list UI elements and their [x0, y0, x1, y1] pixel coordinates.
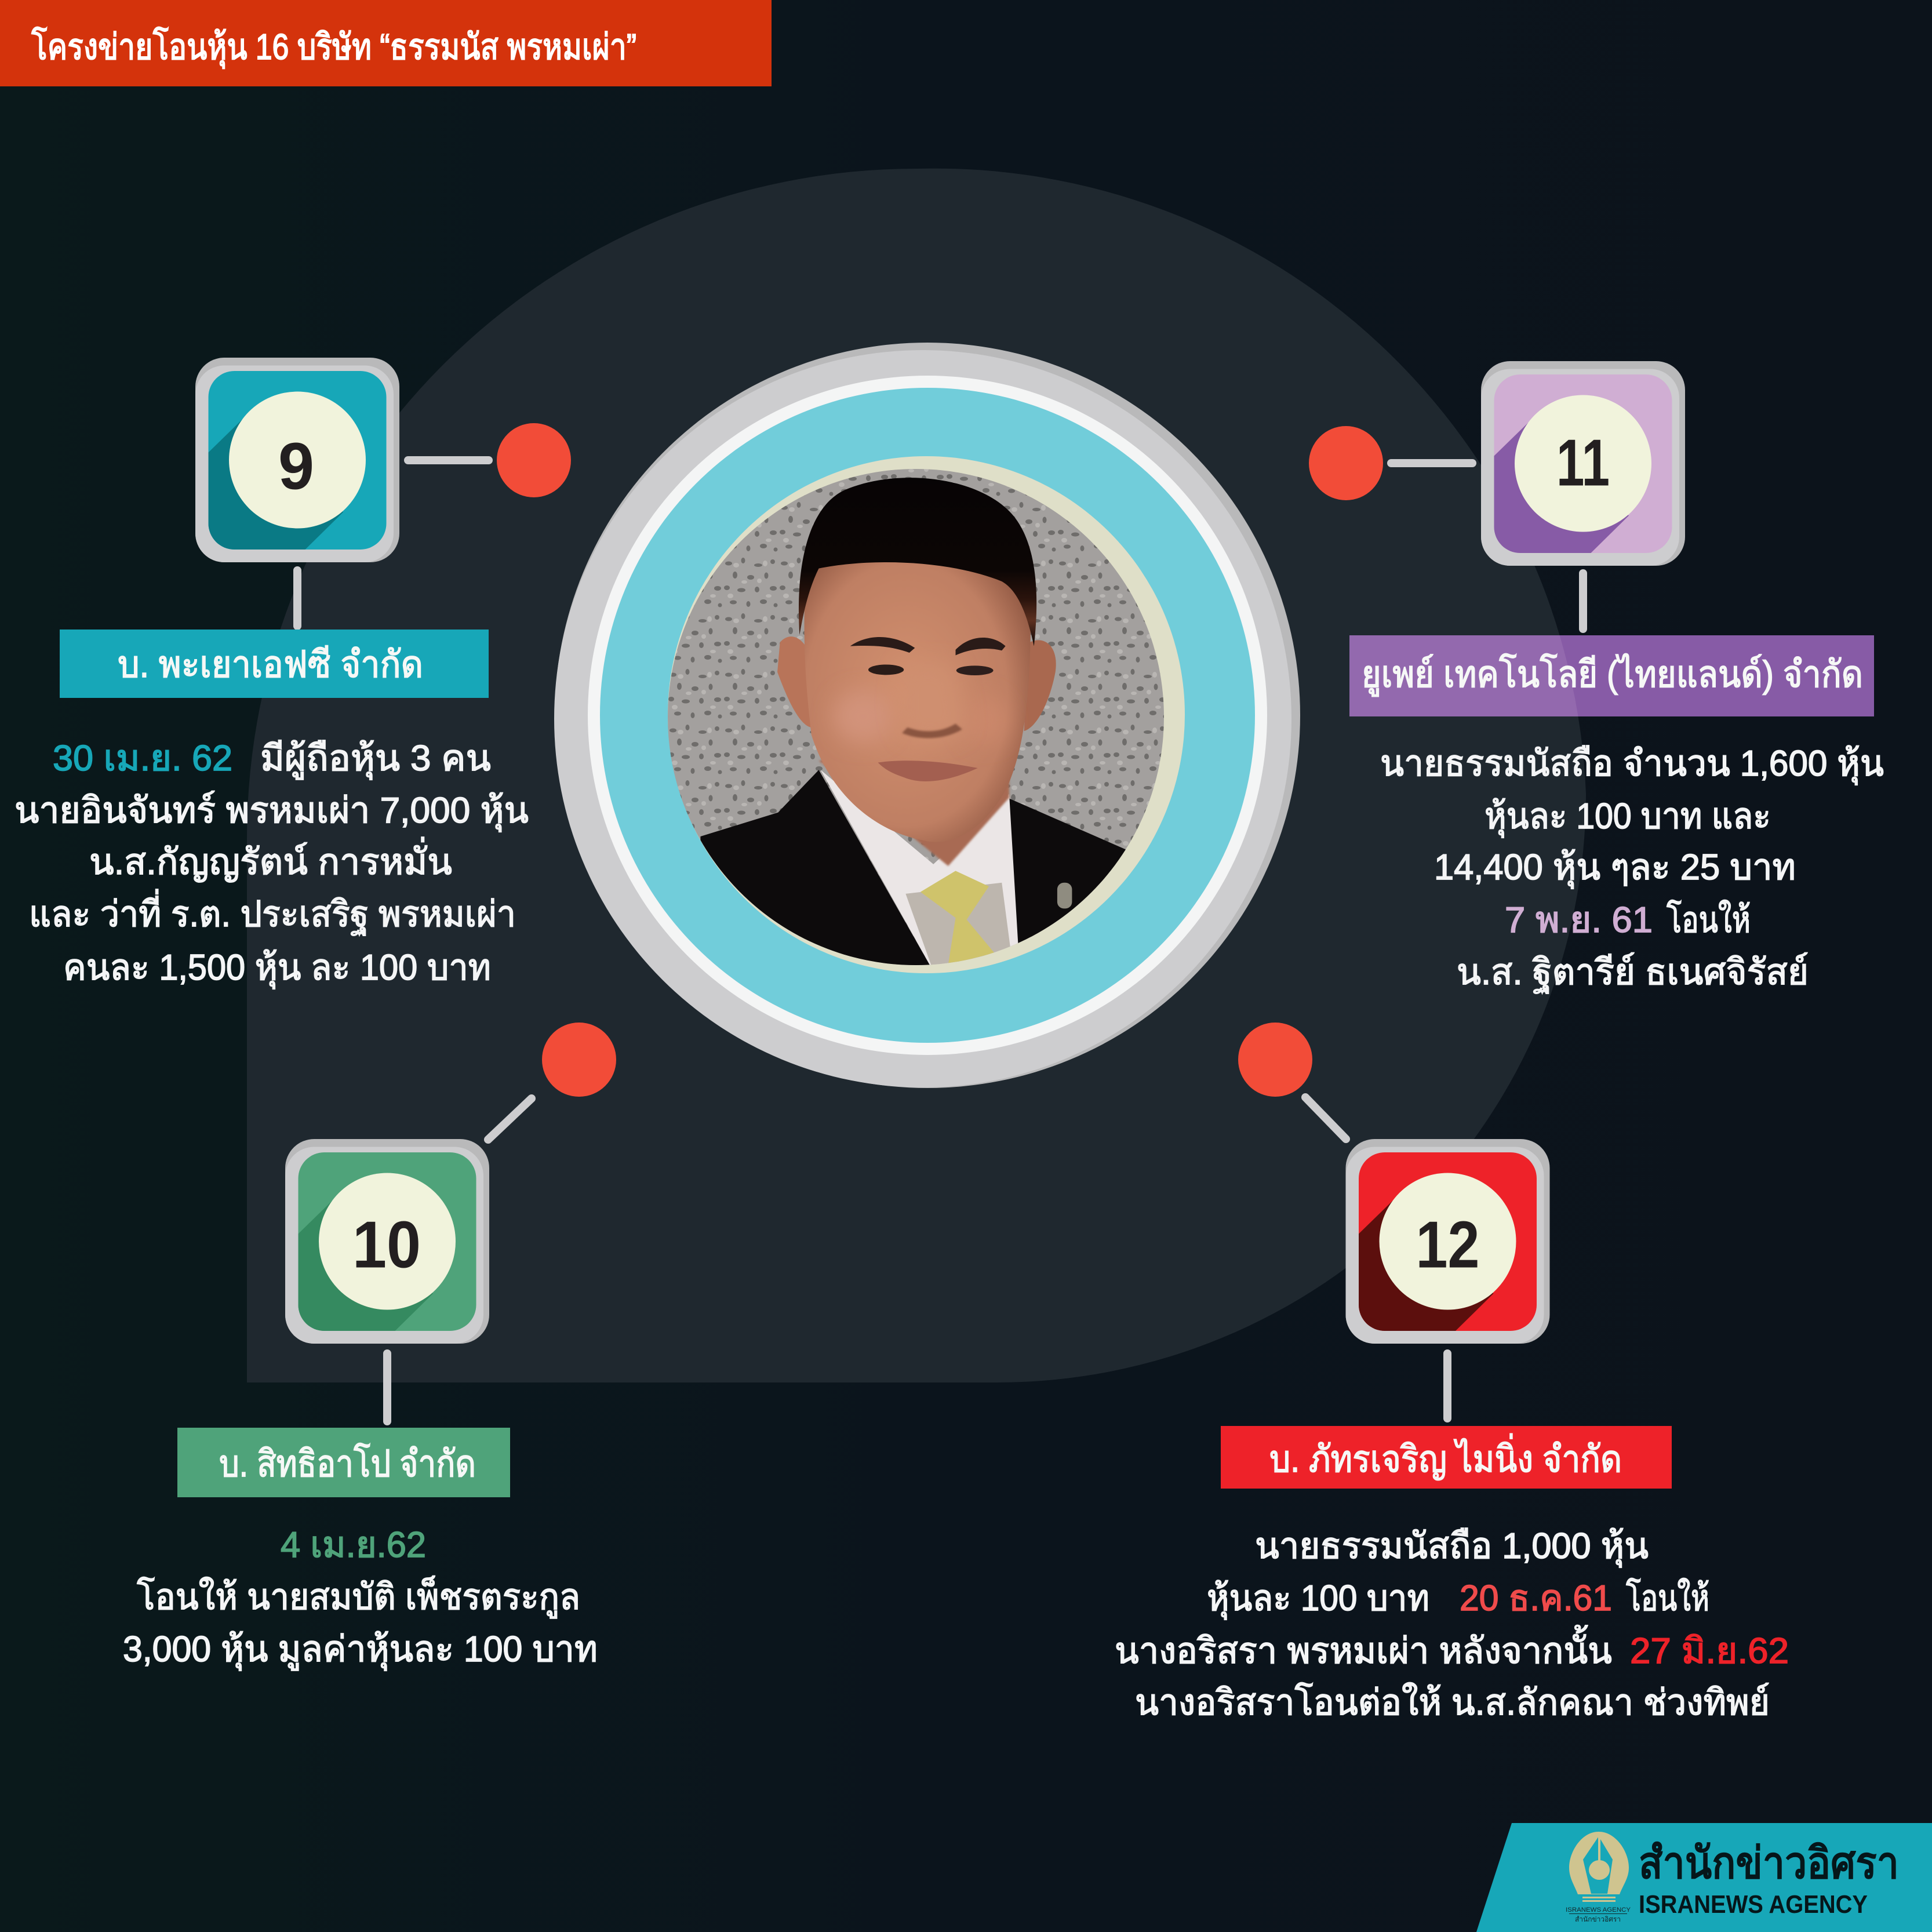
node 10: details text: [123, 1525, 598, 1671]
portrait photo: [661, 464, 1171, 975]
node 9: details text: 30 เม.ย. 62: [53, 738, 232, 778]
title banner: [0, 0, 772, 86]
node 12: number badge: 12: [1416, 1208, 1479, 1282]
title banner: โครงข่ายโอนหุ้น 16 บริษัท “ธรรมนัส พรหมเผ่า”: [31, 27, 636, 68]
node 9: connector to red dot: [404, 423, 571, 497]
node 10: connector to red dot: [488, 1023, 616, 1140]
node 11: connector to label: [1579, 569, 1587, 633]
node 12: connector to label: [1443, 1349, 1451, 1422]
node 9: details text: น.ส.กัญญรัตน์ การหมั่น: [89, 837, 452, 882]
node 9: details text: มีผู้ถือหุ้น 3 คน: [260, 738, 491, 780]
node 11: details text: น.ส. ฐิตารีย์ ธเนศจิรัสย์: [1457, 952, 1809, 994]
node 12: connector to red dot: [1238, 1023, 1346, 1139]
node 11: details text: โอนให้: [1667, 900, 1751, 940]
node 11: details text: นายธรรมนัสถือ จำนวน 1,600 หุ้น: [1380, 744, 1884, 785]
node 12: details text: [1115, 1526, 1789, 1723]
node 9: details text: และ ว่าที่ ร.ต. ประเสริฐ พรหมเผ่า: [29, 889, 516, 936]
icon: pen nib emblem: ISRANEWS AGENCY: [1566, 1906, 1631, 1913]
node 9: details text: คนละ 1,500 หุ้น ละ 100 บาท: [63, 948, 491, 989]
icon: pen nib emblem: [1566, 1832, 1631, 1923]
node 10: connector to label: [383, 1349, 391, 1425]
node 11: number badge: 11: [1556, 427, 1610, 500]
agency name: ISRANEWS AGENCY: [1639, 1890, 1868, 1919]
node 11: details text: 14,400 หุ้น ๆละ 25 บาท: [1434, 847, 1796, 889]
node 9: connector to label: [293, 566, 301, 630]
node 12: details text: นางอริสราโอนต่อให้ น.ส.ลักคณา ช่วงทิพย์: [1135, 1682, 1770, 1723]
icon: pen nib emblem: สำนักข่าวอิศรา: [1575, 1915, 1621, 1923]
node 10: details text: 4 เม.ย.62: [281, 1525, 426, 1565]
agency name: สำนักข่าวอิศรา: [1639, 1839, 1899, 1888]
node 11: company label: [1349, 635, 1874, 716]
node 11: details text: 7 พ.ย. 61: [1505, 900, 1653, 940]
node 10: number badge: 10: [352, 1208, 421, 1282]
agency name: [1639, 1839, 1899, 1919]
node 10: company label: [177, 1428, 510, 1497]
node 10: details text: 3,000 หุ้น มูลค่าหุ้นละ 100 บาท: [123, 1629, 598, 1671]
node 12: details text: 20 ธ.ค.61: [1460, 1578, 1612, 1618]
footer logo panel: [1476, 1823, 1932, 1932]
node 10: details text: โอนให้ นายสมบัติ เพ็ชรตระกูล: [137, 1576, 580, 1618]
node 11: number badge: [1481, 361, 1685, 566]
node 10: company label: บ. สิทธิอาโป จำกัด: [219, 1443, 476, 1485]
central portrait ring: [554, 343, 1300, 1088]
background rounded shape: [247, 169, 1586, 1382]
node 11: company label: ยูเพย์ เทคโนโลยี (ไทยแลนด์) จำกัด: [1362, 653, 1863, 697]
node 12: number badge: [1346, 1139, 1550, 1344]
node 12: company label: [1221, 1426, 1672, 1489]
node 12: company label: บ. ภัทรเจริญ ไมนิ่ง จำกัด: [1269, 1433, 1622, 1480]
node 12: details text: หุ้นละ 100 บาท: [1207, 1578, 1429, 1620]
node 11: details text: [1380, 744, 1884, 994]
node 9: number badge: [195, 358, 399, 562]
node 11: details text: หุ้นละ 100 บาท และ: [1485, 796, 1771, 838]
node 9: details text: [14, 738, 529, 989]
node 12: details text: 27 มิ.ย.62: [1630, 1631, 1789, 1671]
node 11: connector to red dot: [1309, 426, 1476, 500]
node 9: details text: นายอินจันทร์ พรหมเผ่า 7,000 หุ้น: [14, 791, 529, 832]
node 9: company label: บ. พะเยาเอฟซี จำกัด: [118, 643, 423, 685]
node 10: number badge: [285, 1139, 489, 1344]
node 12: details text: นางอริสรา พรหมเผ่า หลังจากนั้น: [1115, 1625, 1612, 1671]
node 12: details text: โอนให้: [1626, 1578, 1709, 1618]
node 9: number badge: 9: [278, 430, 314, 503]
node 12: details text: นายธรรมนัสถือ 1,000 หุ้น: [1255, 1526, 1649, 1567]
node 9: company label: [60, 630, 489, 698]
